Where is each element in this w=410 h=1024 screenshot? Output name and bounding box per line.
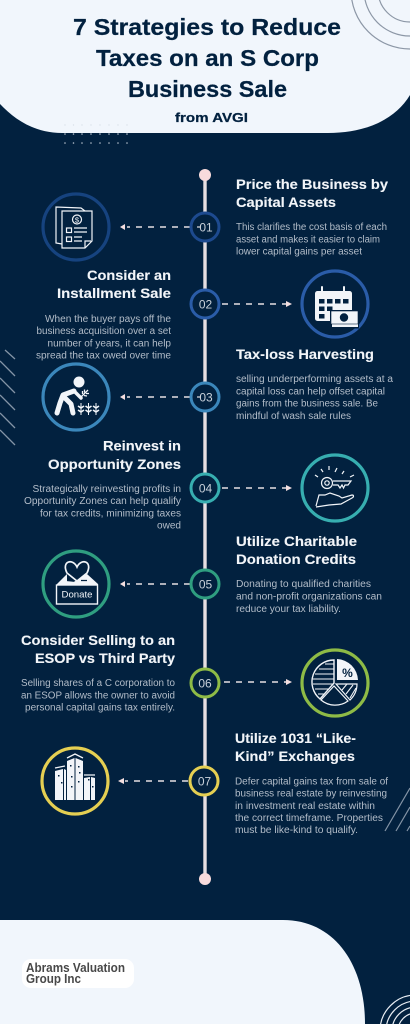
connector arrow 01 xyxy=(120,224,190,230)
body: step 2 xyxy=(36,314,172,362)
body: step 2: When the buyer pays off the xyxy=(45,314,172,325)
node 03 xyxy=(191,383,219,411)
body: step 5: reduce your tax liability. xyxy=(236,604,341,615)
diagonal lines right xyxy=(385,788,410,831)
icon: donation box: Donate xyxy=(62,590,92,600)
node 03: 03 xyxy=(199,390,213,404)
icon: donation box xyxy=(43,551,109,617)
body: step 5: Donating to qualified charities xyxy=(236,579,371,590)
heading: Price the Business xyxy=(236,176,388,210)
heading: Price the Business: Price the Business by xyxy=(236,176,388,192)
connector arrow 07 xyxy=(118,778,188,784)
body: step 7: must be like-kind to qualify. xyxy=(235,825,358,836)
step 6 text xyxy=(21,632,176,714)
icon: pie chart: % xyxy=(342,666,353,680)
connector arrow 05 xyxy=(120,581,190,587)
heading: ESOP vs Third Party xyxy=(21,632,175,666)
node 02 xyxy=(191,290,219,318)
node 07 xyxy=(190,767,218,795)
step 1 text xyxy=(236,176,388,258)
subtitle: from AVGI xyxy=(175,111,248,125)
diagonal lines left xyxy=(0,350,15,445)
node 05: 05 xyxy=(199,578,212,592)
node 06 xyxy=(191,669,219,697)
node 01: 01 xyxy=(199,220,213,234)
heading: 1031 Exchanges xyxy=(235,730,356,764)
heading: Charitable Donation xyxy=(236,533,357,567)
body: step 6: Selling shares of a C corporation to xyxy=(21,678,176,689)
connector arrow 02 xyxy=(222,301,292,307)
heading: 1031 Exchanges: Kind” Exchanges xyxy=(235,748,355,764)
body: step 6: personal capital gains tax entirely. xyxy=(25,702,175,714)
body: step 1: asset and makes it easier to claim xyxy=(236,234,380,246)
body: step 3: mindful of wash sale rules xyxy=(236,411,351,422)
heading: Charitable Donation: Donation Credits xyxy=(236,551,356,567)
connector arrow 04 xyxy=(222,485,292,491)
node 07: 07 xyxy=(198,774,211,788)
step 5 text xyxy=(236,533,382,615)
body: step 7: in investment real estate within xyxy=(235,801,375,812)
icon: office buildings xyxy=(42,748,108,814)
icon: tax documents xyxy=(43,194,109,260)
heading: ESOP vs Third Party: ESOP vs Third Party xyxy=(35,650,175,666)
body: step 4: for tax credits, minimizing taxes xyxy=(40,508,181,520)
step 7 text xyxy=(235,730,388,836)
body: step 4 xyxy=(24,484,181,532)
heading: Charitable Donation: Utilize Charitable xyxy=(236,533,357,549)
heading: 1031 Exchanges: Utilize 1031 “Like- xyxy=(235,730,356,746)
heading: Opportunity Zones: Opportunity Zones xyxy=(48,456,181,472)
body: step 4: Strategically reinvesting profits in xyxy=(32,484,181,495)
body: step 3: capital loss can help offset capital xyxy=(236,386,385,398)
node 04 xyxy=(191,474,219,502)
icon: pie chart xyxy=(302,650,368,716)
node 01 xyxy=(191,213,219,241)
logo xyxy=(22,959,134,988)
icon: person tending crops xyxy=(43,364,109,430)
body: step 2: business acquisition over a set xyxy=(36,326,171,337)
body: step 1: lower capital gains per asset xyxy=(236,246,362,258)
body: step 6 xyxy=(21,678,176,714)
body: step 5: and non-profit organizations can xyxy=(236,592,382,602)
icon: calendar and cash xyxy=(302,271,368,337)
title: Taxes on an S Corp xyxy=(96,45,319,71)
heading: Tax-loss Harvesting: Tax-loss Harvesting xyxy=(236,346,374,362)
footer panel xyxy=(0,920,365,1024)
timeline xyxy=(199,169,211,885)
icon: key over hand xyxy=(302,455,368,521)
body: step 1: This clarifies the cost basis of each xyxy=(236,222,387,233)
body: step 7 xyxy=(235,776,388,836)
node 04: 04 xyxy=(199,482,212,496)
dot grid top xyxy=(64,124,128,144)
title: Business Sale xyxy=(128,76,287,102)
node 05 xyxy=(191,570,219,598)
heading: Installment Sale: Installment Sale xyxy=(57,285,171,301)
node 02: 02 xyxy=(199,298,212,312)
heading: Installment Sale: Consider an xyxy=(87,267,171,283)
icon: tax documents: $ xyxy=(75,215,80,224)
step 2 text xyxy=(36,267,172,362)
heading: Installment Sale xyxy=(57,267,171,301)
body: step 7: the correct timeframe. Properties xyxy=(235,813,383,824)
logo: Group Inc xyxy=(26,972,81,986)
heading: ESOP vs Third Party: Consider Selling to an xyxy=(21,632,175,648)
decorative arcs bottom right xyxy=(380,995,410,1024)
title xyxy=(73,14,341,102)
logo: Abrams Valuation xyxy=(26,961,125,975)
heading: Price the Business: Capital Assets xyxy=(236,194,336,210)
body: step 3: gains from the business sale. Be xyxy=(236,398,379,410)
body: step 1 xyxy=(236,222,387,258)
body: step 2: number of years, it can help xyxy=(48,338,172,350)
connector arrow 06 xyxy=(224,679,292,685)
step 3 text xyxy=(236,346,394,422)
body: step 7: business real estate by reinvesting xyxy=(235,788,387,800)
node 06: 06 xyxy=(198,676,212,690)
body: step 4: owed xyxy=(157,520,181,532)
heading: Opportunity Zones: Reinvest in xyxy=(103,438,181,454)
connector arrow 03 xyxy=(120,394,190,400)
step 4 text xyxy=(24,438,181,532)
body: step 3 xyxy=(236,374,394,422)
body: step 4: Opportunity Zones can help qualify xyxy=(24,496,181,507)
body: step 6: an ESOP allows the owner to avoid xyxy=(21,690,175,702)
heading: Opportunity Zones xyxy=(48,438,181,472)
title: 7 Strategies to Reduce xyxy=(73,14,341,40)
body: step 2: spread the tax owed over time xyxy=(36,350,172,362)
header panel xyxy=(0,0,410,133)
decorative arcs top right xyxy=(351,0,410,49)
body: step 3: selling underperforming assets at a xyxy=(236,374,394,385)
body: step 7: Defer capital gains tax from sale of xyxy=(235,776,388,788)
body: step 5 xyxy=(236,579,382,615)
